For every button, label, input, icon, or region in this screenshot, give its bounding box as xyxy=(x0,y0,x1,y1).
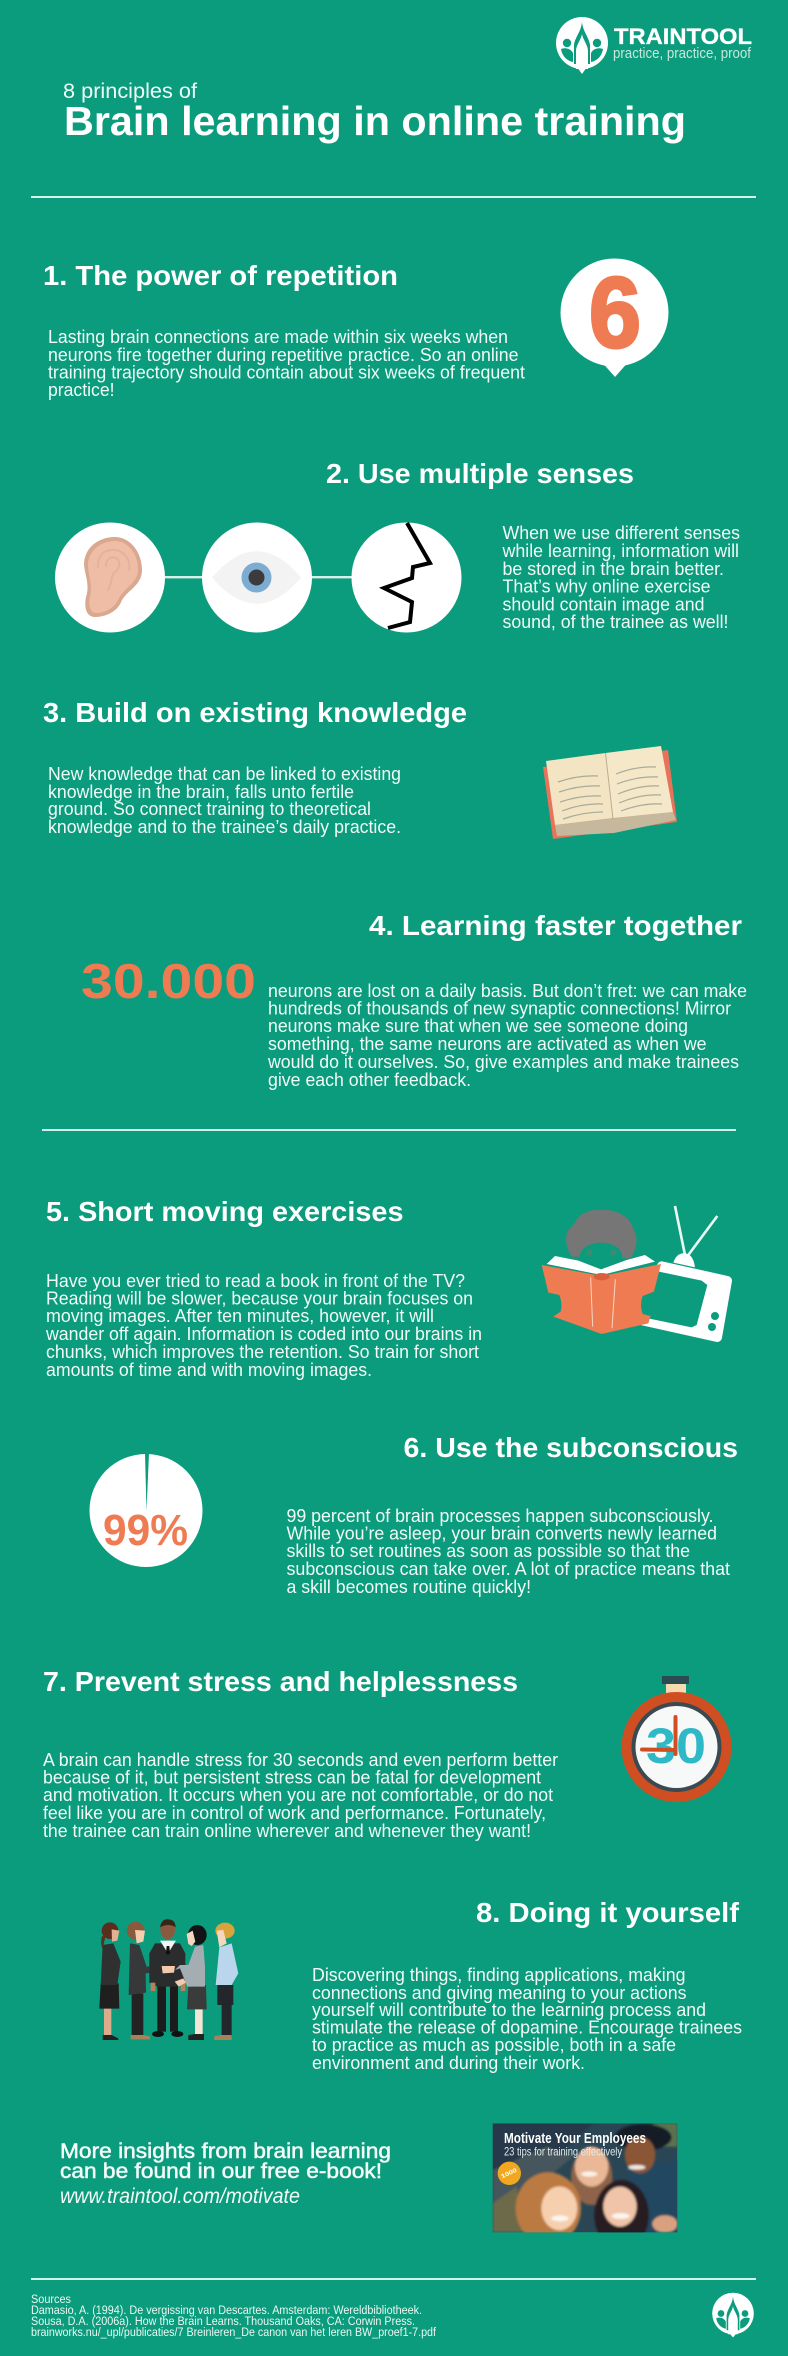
sources: brainworks.nu/_upl/publicaties/7 Breinleren_De canon van het leren BW_proef1-7.pdf xyxy=(31,2325,437,2339)
section 5: Short moving exercises xyxy=(45,1196,727,1380)
section 4: Learning faster together xyxy=(81,910,747,1090)
person 4 xyxy=(175,1925,207,2040)
body text 4: neurons make sure that when we see someone doing xyxy=(268,1015,688,1036)
link url: www.traintool.com/motivate xyxy=(60,2185,300,2208)
body text 5: moving images. After ten minutes, however, it will xyxy=(46,1305,434,1326)
body text 2 xyxy=(502,522,740,632)
body text 4: would do it ourselves. So, give examples and make trainees xyxy=(267,1051,739,1072)
body text 5: Reading will be slower, because your brain focuses on xyxy=(46,1288,473,1308)
e-book cover image: 1000 xyxy=(500,2167,519,2180)
body text 3: ground. So connect training to theoretical xyxy=(48,798,371,819)
body text 2: while learning, information will xyxy=(502,540,739,561)
body text 5: Have you ever tried to read a book in front of the TV? xyxy=(46,1270,465,1291)
heading 5: 5. Short moving exercises xyxy=(46,1196,404,1227)
section 3: Build on existing knowledge xyxy=(43,697,677,839)
body text 6: 99 percent of brain processes happen subconsciously. xyxy=(286,1505,714,1526)
call to action text: More insights from brain learning xyxy=(60,2140,391,2163)
body text 8: yourself will contribute to the learning process and xyxy=(312,1999,706,2020)
body text 6: skills to set routines as soon as possible so that the xyxy=(286,1540,690,1561)
body text 8: stimulate the release of dopamine. Encourage trainees xyxy=(312,2016,742,2038)
section 2: Use multiple senses xyxy=(55,458,740,632)
body text 2: be stored in the brain better. xyxy=(502,558,724,579)
body text 6: While you’re asleep, your brain converts newly learned xyxy=(286,1522,717,1544)
body text 1: Lasting brain connections are made within six weeks when xyxy=(48,326,508,347)
heading 2: 2. Use multiple senses xyxy=(326,458,634,489)
body text 3: New knowledge that can be linked to existing xyxy=(48,763,401,784)
body text 7: because of it, but persistent stress can be fatal for development xyxy=(43,1766,542,1788)
heading 3: 3. Build on existing knowledge xyxy=(43,697,467,728)
e-book cover subtitle: 23 tips for training effectively xyxy=(504,2144,622,2158)
body text 8: environment and during their work. xyxy=(312,2052,585,2073)
heading 8: 8. Doing it yourself xyxy=(476,1897,740,1928)
person 5 xyxy=(214,1923,238,2040)
TV xyxy=(637,1206,727,1337)
senses icons row xyxy=(55,522,462,632)
icon: person reading book in front of TV xyxy=(542,1206,727,1337)
section 7: Prevent stress and helplessness xyxy=(43,1666,732,1841)
subtitle: 8 principles of xyxy=(63,80,197,103)
logo tagline: practice, practice, proof xyxy=(613,45,752,62)
body text 5: wander off again. Information is coded into our brains in xyxy=(45,1323,482,1344)
icon: logo mark xyxy=(556,17,608,74)
reader head xyxy=(566,1210,637,1271)
body text 4: something, the same neurons are activated as when we xyxy=(268,1033,706,1054)
icon: open book xyxy=(543,746,677,839)
body text 8: Discovering things, finding applications, making xyxy=(312,1964,686,1985)
body text 3 xyxy=(48,763,401,837)
section 8: Doing it yourself xyxy=(99,1897,742,2073)
icon: mouth profile xyxy=(352,522,462,632)
heading 7: 7. Prevent stress and helplessness xyxy=(43,1666,518,1697)
body text 2: That’s why online exercise xyxy=(502,576,710,596)
big number 30.000: 30.000 xyxy=(81,955,256,1009)
handshake xyxy=(162,1966,175,1973)
body text 3: knowledge and to the trainee’s daily practice. xyxy=(48,816,401,837)
icon: eye xyxy=(202,522,312,632)
icon: small footer logo xyxy=(712,2293,754,2338)
main title: Brain learning in online training xyxy=(64,98,686,144)
call to action text: can be found in our free e-book! xyxy=(60,2160,382,2183)
body text 4 xyxy=(267,980,747,1090)
sources: Sources xyxy=(31,2292,71,2306)
section 1: The power of repetition xyxy=(43,257,668,400)
icon: group of five business people xyxy=(99,1919,238,2040)
sources xyxy=(31,2292,437,2339)
icon: stopwatch showing 30: 30 xyxy=(646,1718,706,1774)
body text 6: subconscious can take over. A lot of practice means that xyxy=(286,1558,731,1579)
heading 1: 1. The power of repetition xyxy=(43,260,398,291)
reader book xyxy=(542,1255,661,1334)
e-book cover image xyxy=(492,2123,678,2232)
body text 5 xyxy=(45,1270,482,1380)
body text 2: should contain image and xyxy=(502,594,704,614)
e-book cover title: Motivate Your Employees xyxy=(504,2130,646,2147)
body text 4: hundreds of thousands of new synaptic connections! Mirror xyxy=(268,998,731,1018)
pie chart: 99%: 99% xyxy=(103,1506,188,1555)
body text 7: feel like you are in control of work and performance. Fortunately, xyxy=(43,1802,546,1823)
body text 7: A brain can handle stress for 30 seconds and even perform better xyxy=(43,1749,558,1770)
logo wordmark: TRAINTOOL xyxy=(614,24,752,49)
icon: ear xyxy=(55,522,165,632)
call to action text xyxy=(60,2140,391,2183)
body text 1: neurons fire together during repetitive practice. So an online xyxy=(48,344,518,365)
body text 5: amounts of time and with moving images. xyxy=(46,1359,372,1380)
logo: Traintool xyxy=(556,17,752,74)
body text 4: give each other feedback. xyxy=(268,1069,471,1090)
body text 2: When we use different senses xyxy=(502,522,740,543)
person 1 xyxy=(99,1922,121,2040)
body text 1: training trajectory should contain about six weeks of frequent xyxy=(48,362,526,382)
body text 7: and motivation. It occurs when you are not comfortable, or do not xyxy=(43,1784,554,1805)
body text 1: practice! xyxy=(48,379,114,400)
body text 7: the trainee can train online wherever and whenever they want! xyxy=(43,1820,531,1841)
heading 6: 6. Use the subconscious xyxy=(404,1432,738,1463)
sources: Damasio, A. (1994). De vergissing van Descartes. Amsterdam: Wereldbibliotheek. xyxy=(31,2303,422,2317)
body text 2: sound, of the trainee as well! xyxy=(502,611,728,632)
body text 3: knowledge in the brain, falls unto fertile xyxy=(48,781,354,802)
title block xyxy=(63,80,686,144)
body text 8: to practice as much as possible, both in a safe xyxy=(312,2034,676,2055)
body text 6: a skill becomes routine quickly! xyxy=(286,1576,531,1597)
icon: speech bubble with number 6 xyxy=(560,257,668,377)
pie chart: 99% xyxy=(90,1453,202,1567)
section 6: Use the subconscious xyxy=(90,1432,738,1597)
body text 7 xyxy=(43,1749,558,1841)
icon: speech bubble with number 6: 6 xyxy=(589,257,641,369)
person 2 xyxy=(127,1922,162,2039)
body text 6 xyxy=(286,1505,731,1597)
icon: stopwatch showing 30 xyxy=(622,1676,732,1802)
body text 8: connections and giving meaning to your actions xyxy=(312,1982,686,2003)
person 3 xyxy=(149,1919,185,2037)
body text 1 xyxy=(48,326,526,400)
body text 4: neurons are lost on a daily basis. But don’t fret: we can make xyxy=(268,980,747,1001)
heading 4: 4. Learning faster together xyxy=(369,910,742,941)
call to action: e-book xyxy=(60,2123,678,2232)
body text 8 xyxy=(312,1964,742,2073)
sources: Sousa, D.A. (2006a). How the Brain Learns. Thousand Oaks, CA: Corwin Press. xyxy=(31,2314,415,2328)
body text 5: chunks, which improves the retention. So train for short xyxy=(46,1341,480,1362)
